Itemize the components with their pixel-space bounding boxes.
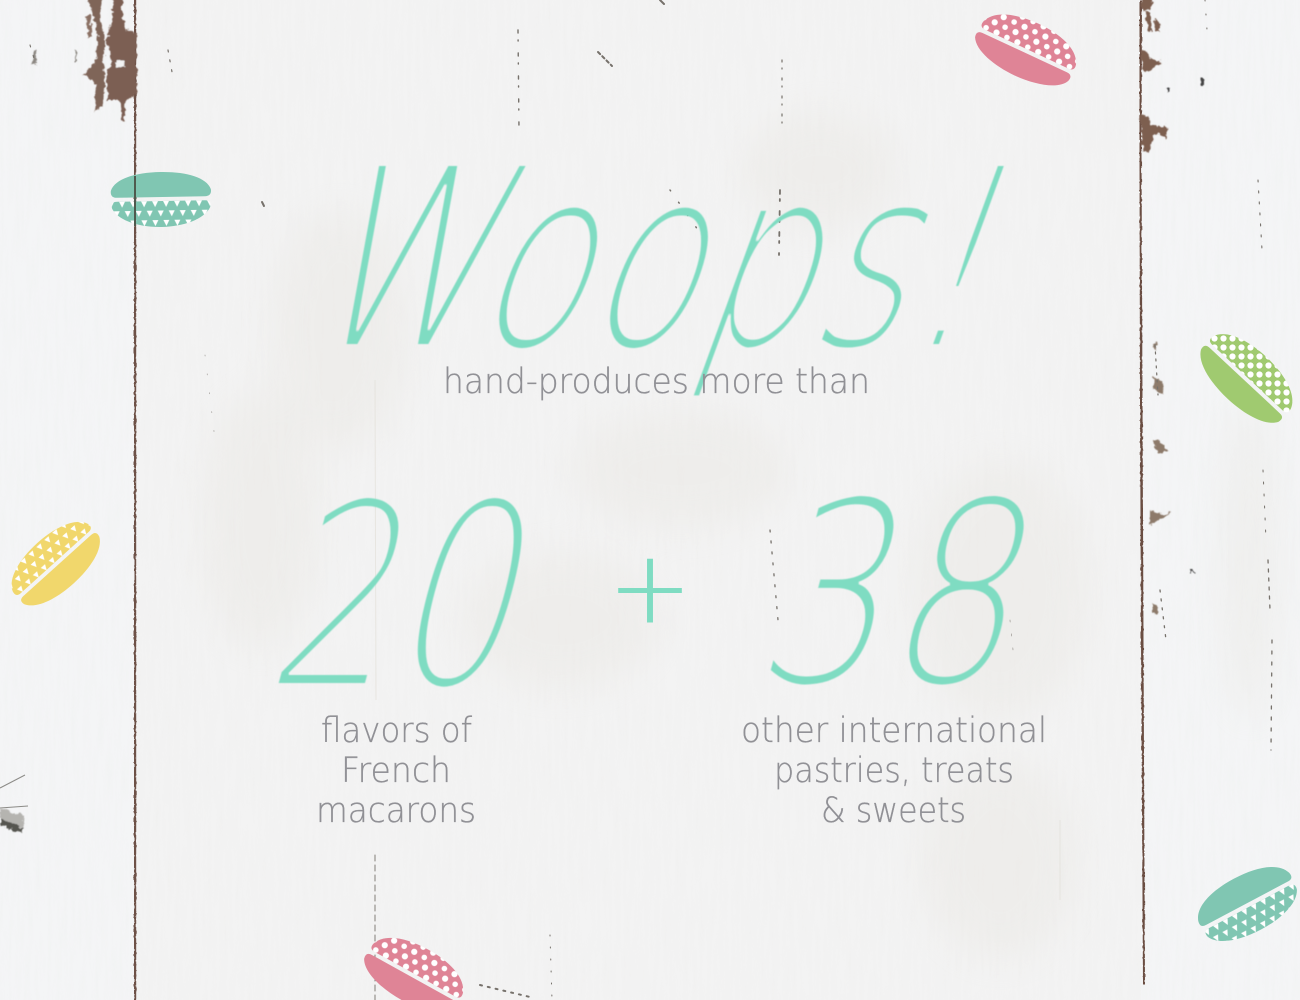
- number: 20: 20: [248, 451, 568, 744]
- title: Woops!: Woops!: [278, 116, 1055, 404]
- paint chips: right: [1140, 0, 1204, 616]
- number: 38: 38: [735, 449, 1069, 742]
- caption: French macarons: [316, 711, 476, 831]
- caption: other international pastries: pastries, treats: [774, 751, 1014, 791]
- paint chips: left: [0, 0, 136, 833]
- caption: French macarons: macarons: [316, 791, 476, 831]
- plank seam: right: [1140, 0, 1145, 985]
- macaron: teal bottom right: [1188, 854, 1300, 954]
- macaron: teal top left: [110, 171, 212, 228]
- macaron: pink top right: [967, 2, 1085, 97]
- plank seam: left: [134, 0, 136, 1000]
- caption: French macarons: flavors of: [321, 711, 473, 751]
- caption: other international pastries: other international: [741, 711, 1047, 751]
- faint cracks: [375, 380, 1060, 900]
- scratches: lower left: [0, 775, 28, 808]
- macaron: pink bottom: [355, 924, 474, 1000]
- seam showing through teal macaron: [134, 176, 136, 226]
- subtitle: hand-produces more than: [443, 362, 870, 402]
- plus sign: +: [608, 529, 692, 646]
- caption: French macarons: French: [341, 751, 451, 791]
- caption: other international pastries: & sweets: [821, 791, 966, 831]
- macaron: yellow left: [0, 509, 111, 618]
- macaron: green right: [1188, 321, 1300, 435]
- caption: other international pastries: [741, 711, 1047, 831]
